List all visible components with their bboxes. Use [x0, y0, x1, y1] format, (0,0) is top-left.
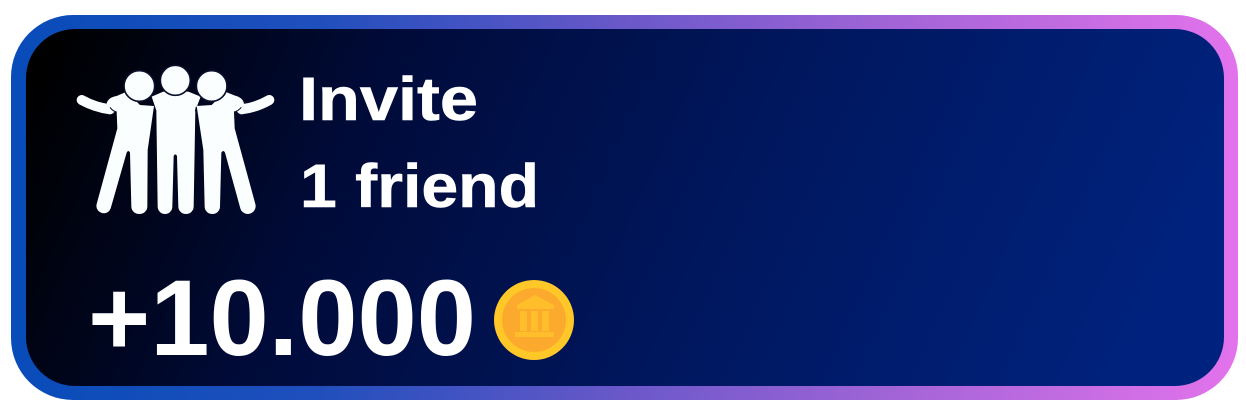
- heading: invite: Invite: [299, 65, 478, 133]
- reward amount: +10.000: [88, 257, 476, 378]
- heading: 1 friend: 1 friend: [300, 152, 539, 220]
- icon: bank coin: [494, 280, 574, 360]
- icon: three friends: [82, 65, 269, 214]
